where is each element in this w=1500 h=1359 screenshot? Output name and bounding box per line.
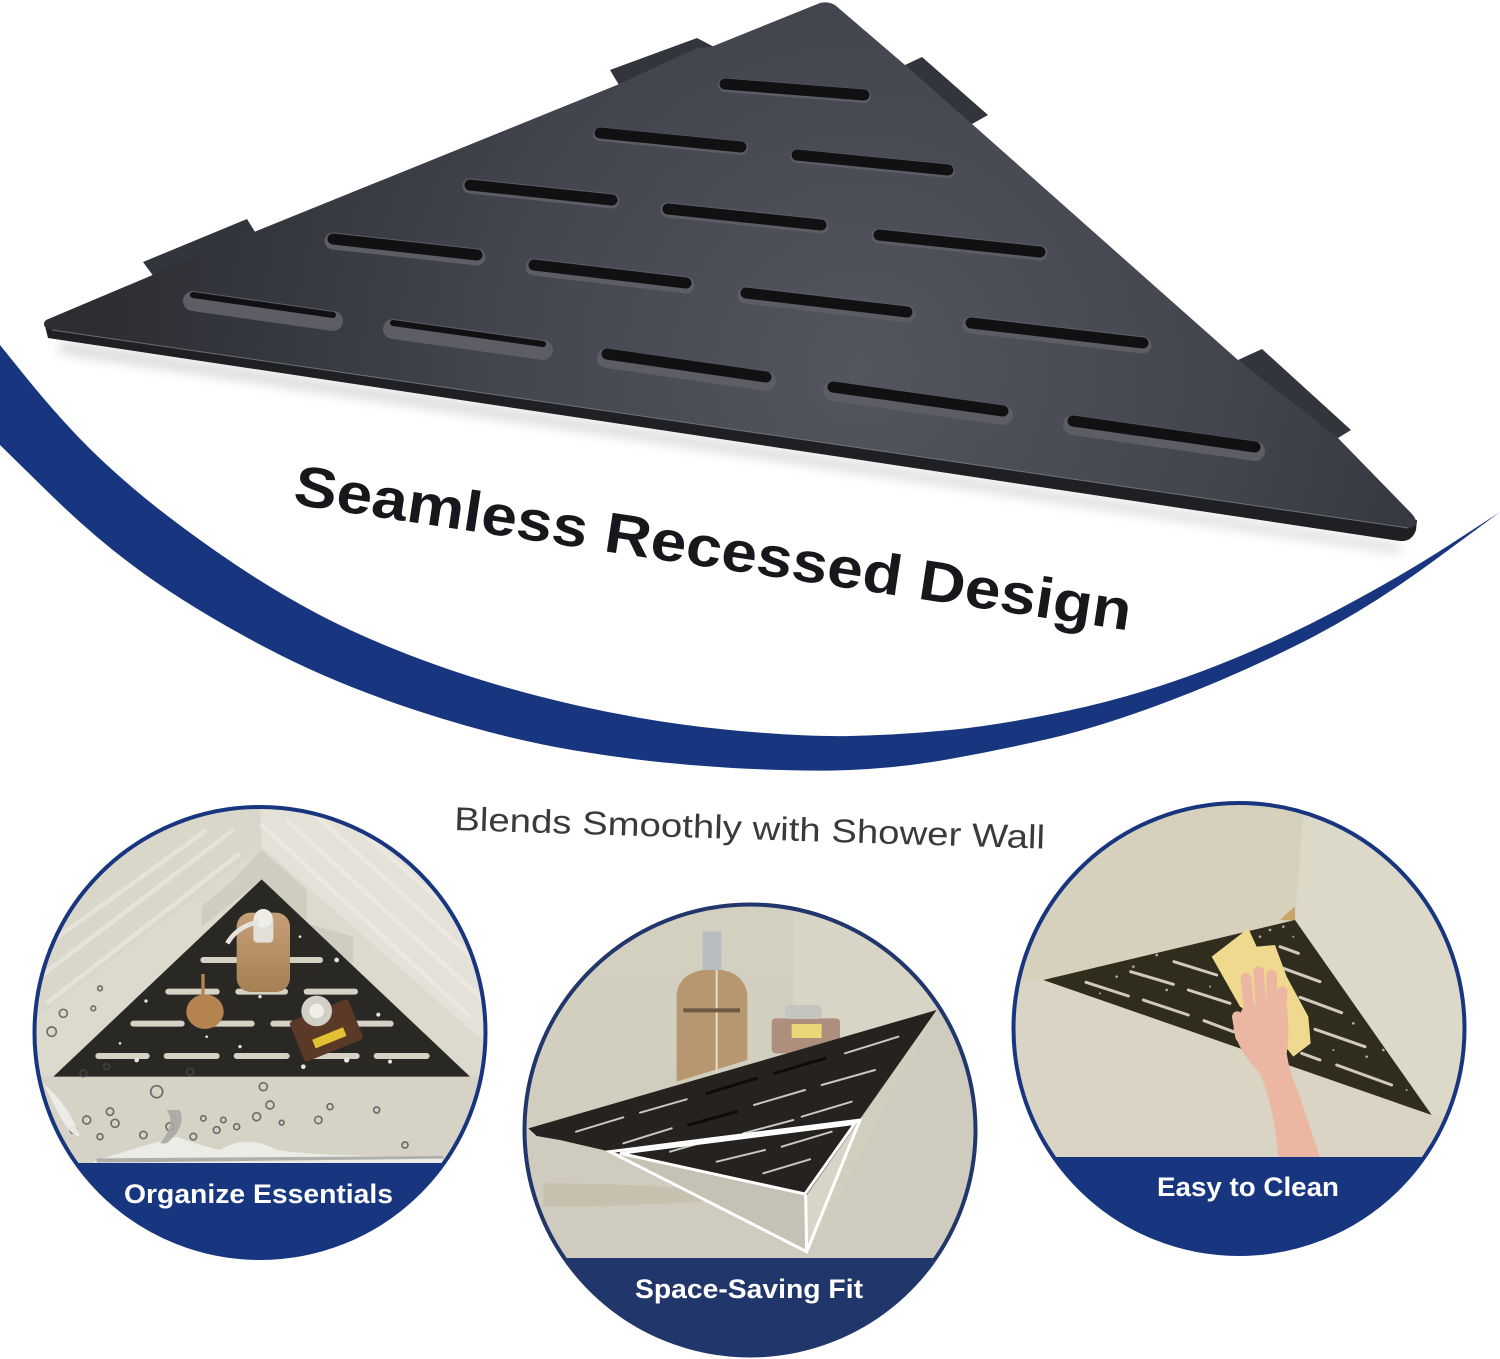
- subheading: Blends Smoothly with Shower Wall: [454, 800, 1046, 856]
- shelf shadow: [60, 342, 1400, 552]
- caption banner: [566, 1258, 934, 1354]
- tall bottle: [677, 932, 747, 1082]
- headline: Seamless Recessed Design: [290, 454, 1136, 643]
- circle photo: shelf with water: [36, 809, 484, 1163]
- water droplets: [47, 986, 408, 1148]
- ring: [524, 904, 976, 1356]
- edge highlight: [52, 330, 1408, 528]
- small bottle: [772, 1005, 840, 1053]
- cloth: [1212, 928, 1311, 1057]
- caption: Space-Saving Fit: [635, 1274, 863, 1304]
- circle photo: shelf with outline: [526, 906, 974, 1258]
- panel: organize essentials: [32, 805, 488, 1260]
- blue swoosh: [0, 345, 1500, 771]
- circle photo: hand wiping shelf: [1016, 805, 1462, 1157]
- ring: [34, 807, 486, 1258]
- shelf product: [44, 2, 1417, 552]
- hand: [1233, 972, 1320, 1158]
- ring: [1014, 803, 1464, 1254]
- pump bottle: [227, 909, 290, 992]
- shelf face: [528, 1010, 937, 1195]
- shelf triangle: [1043, 920, 1432, 1115]
- caption banner: [78, 1163, 442, 1256]
- caption: Easy to Clean: [1157, 1172, 1339, 1202]
- panel: space-saving fit: [522, 902, 978, 1358]
- triangle void: [610, 1152, 807, 1252]
- slot highlights: [576, 1037, 898, 1173]
- perfume bottle: [290, 996, 363, 1062]
- panel: easy to clean: [1012, 801, 1466, 1256]
- shelf triangle: [53, 879, 470, 1077]
- caption: Organize Essentials: [124, 1179, 393, 1209]
- wooden dish: [186, 974, 224, 1029]
- drainage slots: [193, 84, 1255, 451]
- shelf front edge: [44, 322, 1417, 541]
- shelf plate: [44, 2, 1416, 528]
- caption banner: [1056, 1157, 1422, 1252]
- mounting tabs: [143, 38, 1351, 438]
- white outline: [610, 1120, 860, 1252]
